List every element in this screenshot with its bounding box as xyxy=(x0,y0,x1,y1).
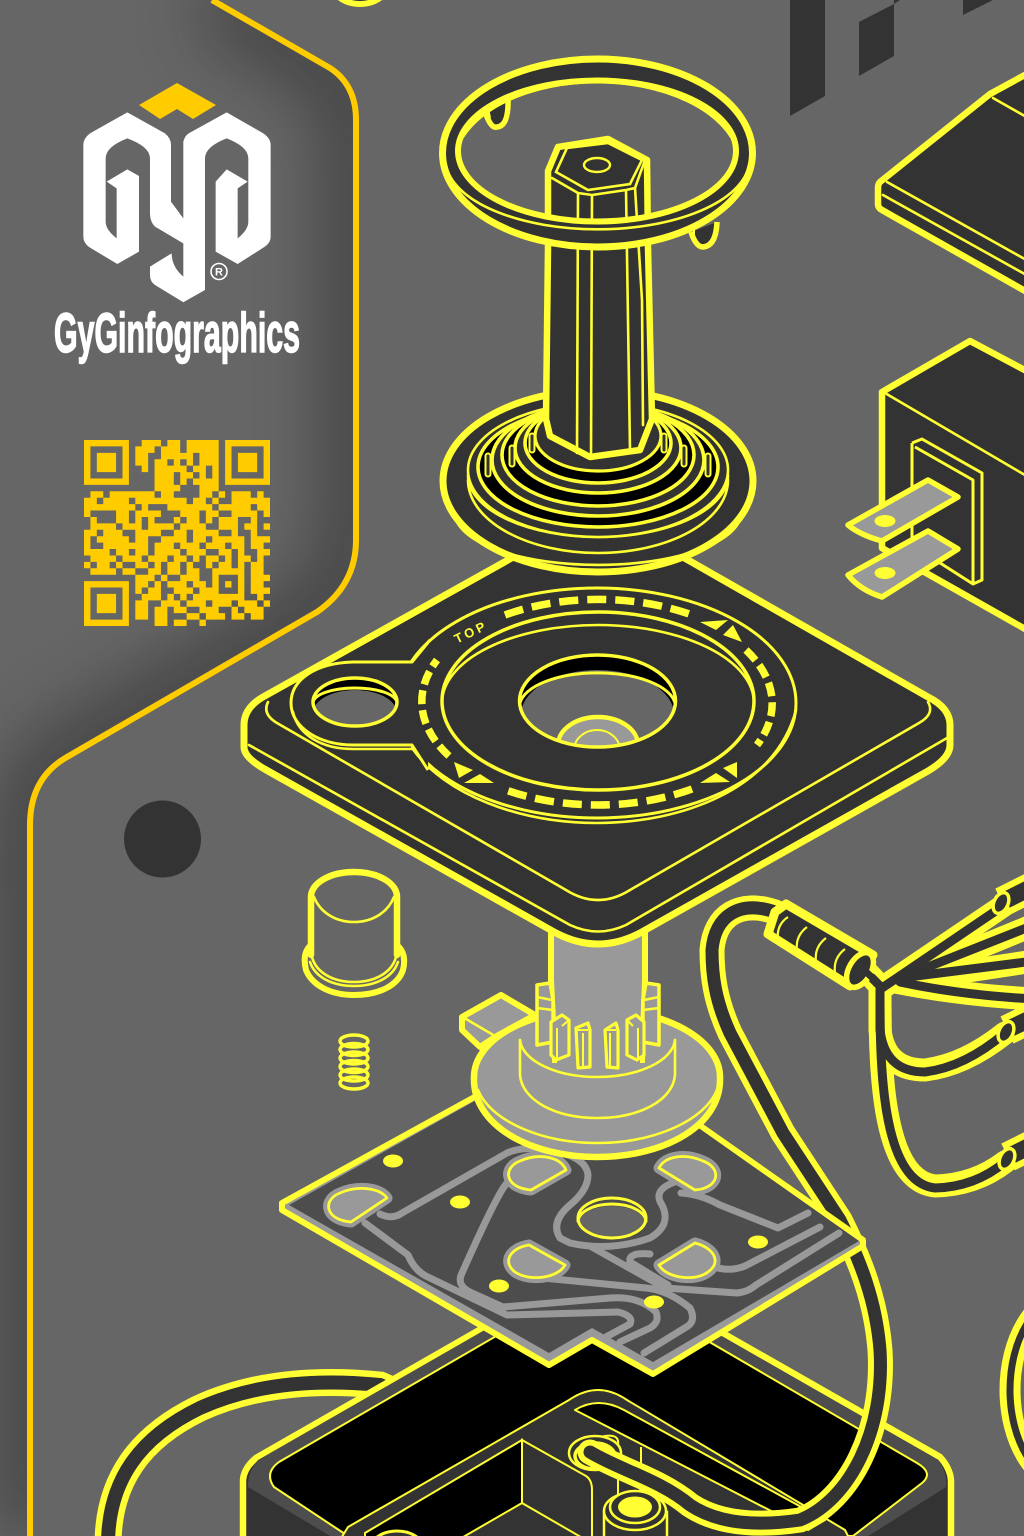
stem facet lines xyxy=(552,160,645,457)
rib outer xyxy=(468,403,728,537)
part: joystick base box xyxy=(243,1262,951,1536)
inner slot xyxy=(575,1403,825,1530)
actuator collar arc xyxy=(520,1040,675,1077)
dashed dial ring xyxy=(422,599,772,805)
brand wordmark: GyGinfographics xyxy=(54,301,300,364)
part: top plate xyxy=(244,510,950,944)
ring tab upper left xyxy=(484,98,508,127)
small hole xyxy=(313,678,397,736)
logo: GyG mark xyxy=(83,83,271,302)
part: power adapter xyxy=(848,341,1024,634)
part peeking in at top edge xyxy=(330,0,390,4)
part: main cable xyxy=(590,908,880,1523)
board centre hole xyxy=(578,1198,646,1244)
button body xyxy=(311,872,397,955)
part: gray microswitch actuator xyxy=(462,925,720,1157)
ring tab lower right xyxy=(691,222,717,247)
rib tabs xyxy=(488,436,708,474)
part: joystick stem xyxy=(546,139,652,457)
rib black 3 xyxy=(525,403,671,483)
icon: registered mark xyxy=(211,264,227,280)
base disc thin lines xyxy=(455,475,741,565)
rib dark 3 xyxy=(535,401,661,471)
part: circuit board xyxy=(279,1094,866,1377)
rib black 2 xyxy=(502,404,694,506)
button lower arcs xyxy=(310,897,398,986)
dial label: TOP xyxy=(452,617,490,646)
board top surface xyxy=(289,1043,859,1362)
prong upper xyxy=(848,480,958,541)
harness dark wires xyxy=(862,908,1024,1188)
dark screw hole circle xyxy=(124,800,201,878)
box opening xyxy=(270,1277,927,1536)
panel: sidebar outline xyxy=(30,0,356,1536)
yellow mounting dots xyxy=(383,1154,768,1308)
plate ear for small hole xyxy=(291,640,430,770)
part: spring xyxy=(340,1035,368,1089)
plate outer ring xyxy=(398,588,796,818)
inner ring xyxy=(442,612,754,790)
part: left cable xyxy=(108,1382,410,1536)
part: button cap xyxy=(305,872,404,995)
rib dark 2 xyxy=(515,403,681,493)
inner compartment right face xyxy=(522,1440,592,1536)
side tooth left xyxy=(537,983,553,1045)
tooth edge lines xyxy=(557,1020,638,1067)
centre hole xyxy=(518,653,678,749)
stem top bore xyxy=(584,158,610,172)
switch mount ring xyxy=(569,1436,641,1500)
dial triangle markers xyxy=(454,620,742,783)
plate surface line xyxy=(266,702,930,900)
side tooth right xyxy=(643,983,659,1045)
dark decorative squares, top xyxy=(790,0,993,116)
box rim xyxy=(248,1265,946,1536)
actuator disc xyxy=(474,1009,720,1157)
board traces xyxy=(365,1149,839,1353)
QR code xyxy=(84,440,270,626)
part: flat box top right xyxy=(878,70,1024,296)
box body xyxy=(243,1262,951,1536)
plate ring lower echo xyxy=(412,710,796,823)
connector 1 xyxy=(990,886,1024,916)
plate outline xyxy=(244,510,950,944)
connector 2 xyxy=(995,1017,1024,1045)
icon: orange chevron xyxy=(139,83,216,119)
adapter body xyxy=(882,341,1024,634)
ring thin lines xyxy=(446,82,749,229)
screw stud arc xyxy=(371,1531,423,1536)
central peg xyxy=(604,1491,667,1536)
ring inner stroke xyxy=(458,80,736,222)
board edge xyxy=(282,1040,863,1374)
part: right edge cable loop xyxy=(1010,1295,1024,1485)
icon: registered mark: R xyxy=(215,266,223,278)
plate ear echo xyxy=(293,712,414,749)
base disc xyxy=(443,390,753,572)
adapter edge line xyxy=(885,393,1024,478)
button flange xyxy=(305,945,404,995)
harness yellow sheath xyxy=(865,906,1024,1186)
plate edge line xyxy=(249,738,947,932)
panel: brand sidebar shadow xyxy=(30,0,356,1536)
stem top hexagon xyxy=(556,143,642,190)
inner ring crescent xyxy=(442,625,754,703)
part: wire harness xyxy=(768,886,1024,1188)
actuator cylinder xyxy=(520,1040,675,1118)
solder pads xyxy=(329,1157,716,1278)
front teeth xyxy=(551,1015,644,1068)
ferrule xyxy=(768,904,880,992)
icon: white monogram xyxy=(83,112,271,302)
rib dark 1 xyxy=(492,404,704,516)
part: gaiter and base disc xyxy=(443,390,753,572)
prong mount xyxy=(912,439,982,584)
ring outer stroke xyxy=(442,59,752,247)
inner compartment left face xyxy=(365,1440,522,1536)
inner platform xyxy=(340,1390,850,1536)
stem body xyxy=(546,139,652,457)
pad outlines xyxy=(329,1157,716,1278)
part: top ring xyxy=(439,56,756,250)
actuator shaft xyxy=(551,925,645,1060)
ring band xyxy=(446,62,749,244)
rib black 1 xyxy=(478,407,718,527)
actuator tab xyxy=(462,995,535,1047)
prong lower xyxy=(848,531,958,597)
connector 3 xyxy=(996,1144,1024,1172)
